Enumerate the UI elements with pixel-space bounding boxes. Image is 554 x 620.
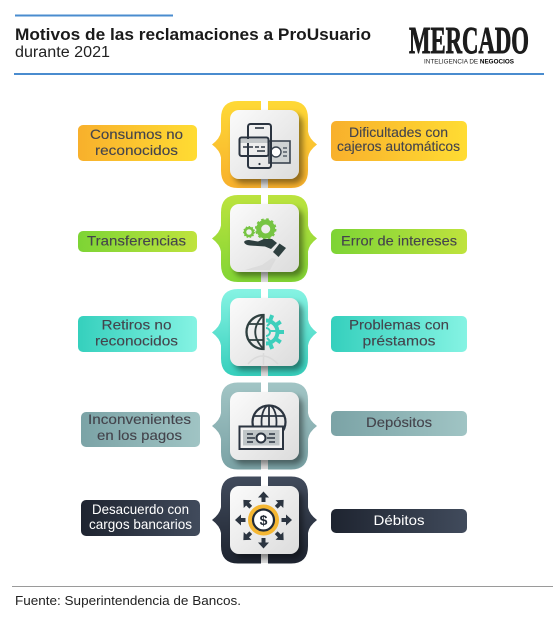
connector <box>261 272 268 282</box>
title: Motivos de las reclamaciones a ProUsuario <box>15 25 371 44</box>
label: Débitos <box>331 509 467 533</box>
label: Problemas con préstamos: Problemas con <box>349 316 449 332</box>
label: Error de intereses <box>331 229 467 254</box>
label: Problemas con préstamos: préstamos <box>362 332 436 348</box>
card <box>230 298 299 366</box>
icon: phone, card and banknote <box>240 124 290 168</box>
row 5: navy <box>212 476 317 564</box>
label: Desacuerdo con cargos bancarios: Desacuerdo con <box>92 501 189 517</box>
icon: hand with gears <box>244 220 286 270</box>
connector <box>261 554 268 563</box>
card <box>230 204 299 272</box>
label: Transferencias: Transferencias <box>87 232 186 248</box>
row 1: yellow <box>212 101 317 188</box>
label: Retiros no reconocidos <box>78 316 197 352</box>
connector <box>261 366 268 376</box>
title <box>15 25 371 61</box>
icon: dollar coin with arrows: $ <box>260 512 268 528</box>
source note: Fuente: Superintendencia de Bancos. <box>15 593 241 608</box>
top accent line <box>15 14 173 16</box>
label: Desacuerdo con cargos bancarios <box>81 500 200 536</box>
label: Depósitos <box>331 411 467 436</box>
label: Inconvenientes en los pagos <box>81 411 200 447</box>
label: Consumos no reconocidos: Consumos no <box>90 126 183 142</box>
label: Retiros no reconocidos: reconocidos <box>95 332 178 348</box>
row 2: green <box>212 195 317 282</box>
label: Transferencias <box>78 231 197 252</box>
icon: globe and banknote <box>240 405 286 449</box>
frame <box>212 382 317 470</box>
label: Dificultades con cajeros automáticos: Dificultades con <box>349 124 448 140</box>
label: Dificultades con cajeros automáticos: cajeros automáticos <box>337 138 460 154</box>
label: Débitos: Débitos <box>374 512 424 528</box>
label: Consumos no reconocidos <box>78 125 197 161</box>
label: Desacuerdo con cargos bancarios: cargos bancarios <box>89 516 192 532</box>
title: durante 2021 <box>15 44 110 61</box>
frame <box>212 195 317 282</box>
label: Error de intereses: Error de intereses <box>341 232 457 248</box>
frame <box>212 476 317 564</box>
icon: half globe and half gear <box>246 315 284 365</box>
label: Inconvenientes en los pagos: en los pagos <box>97 427 182 443</box>
frame <box>212 289 317 376</box>
label: Depósitos: Depósitos <box>366 414 432 430</box>
row 3: turquoise <box>212 289 317 376</box>
frame <box>212 101 317 188</box>
label: Retiros no reconocidos: Retiros no <box>102 316 172 332</box>
card <box>230 110 299 179</box>
logo: Mercado: INTELIGENCIA DE NEGOCIOS <box>424 58 515 66</box>
label: Inconvenientes en los pagos: Inconvenientes <box>88 411 191 427</box>
label: Consumos no reconocidos: reconocidos <box>95 142 178 158</box>
card <box>230 486 299 554</box>
header divider <box>14 73 544 75</box>
label: Problemas con préstamos <box>331 316 467 352</box>
connector <box>261 460 268 469</box>
label: Dificultades con cajeros automáticos <box>331 121 467 161</box>
card <box>230 392 299 460</box>
connector <box>261 179 268 188</box>
row 4: grey-teal <box>212 382 317 470</box>
footer divider <box>12 586 553 587</box>
